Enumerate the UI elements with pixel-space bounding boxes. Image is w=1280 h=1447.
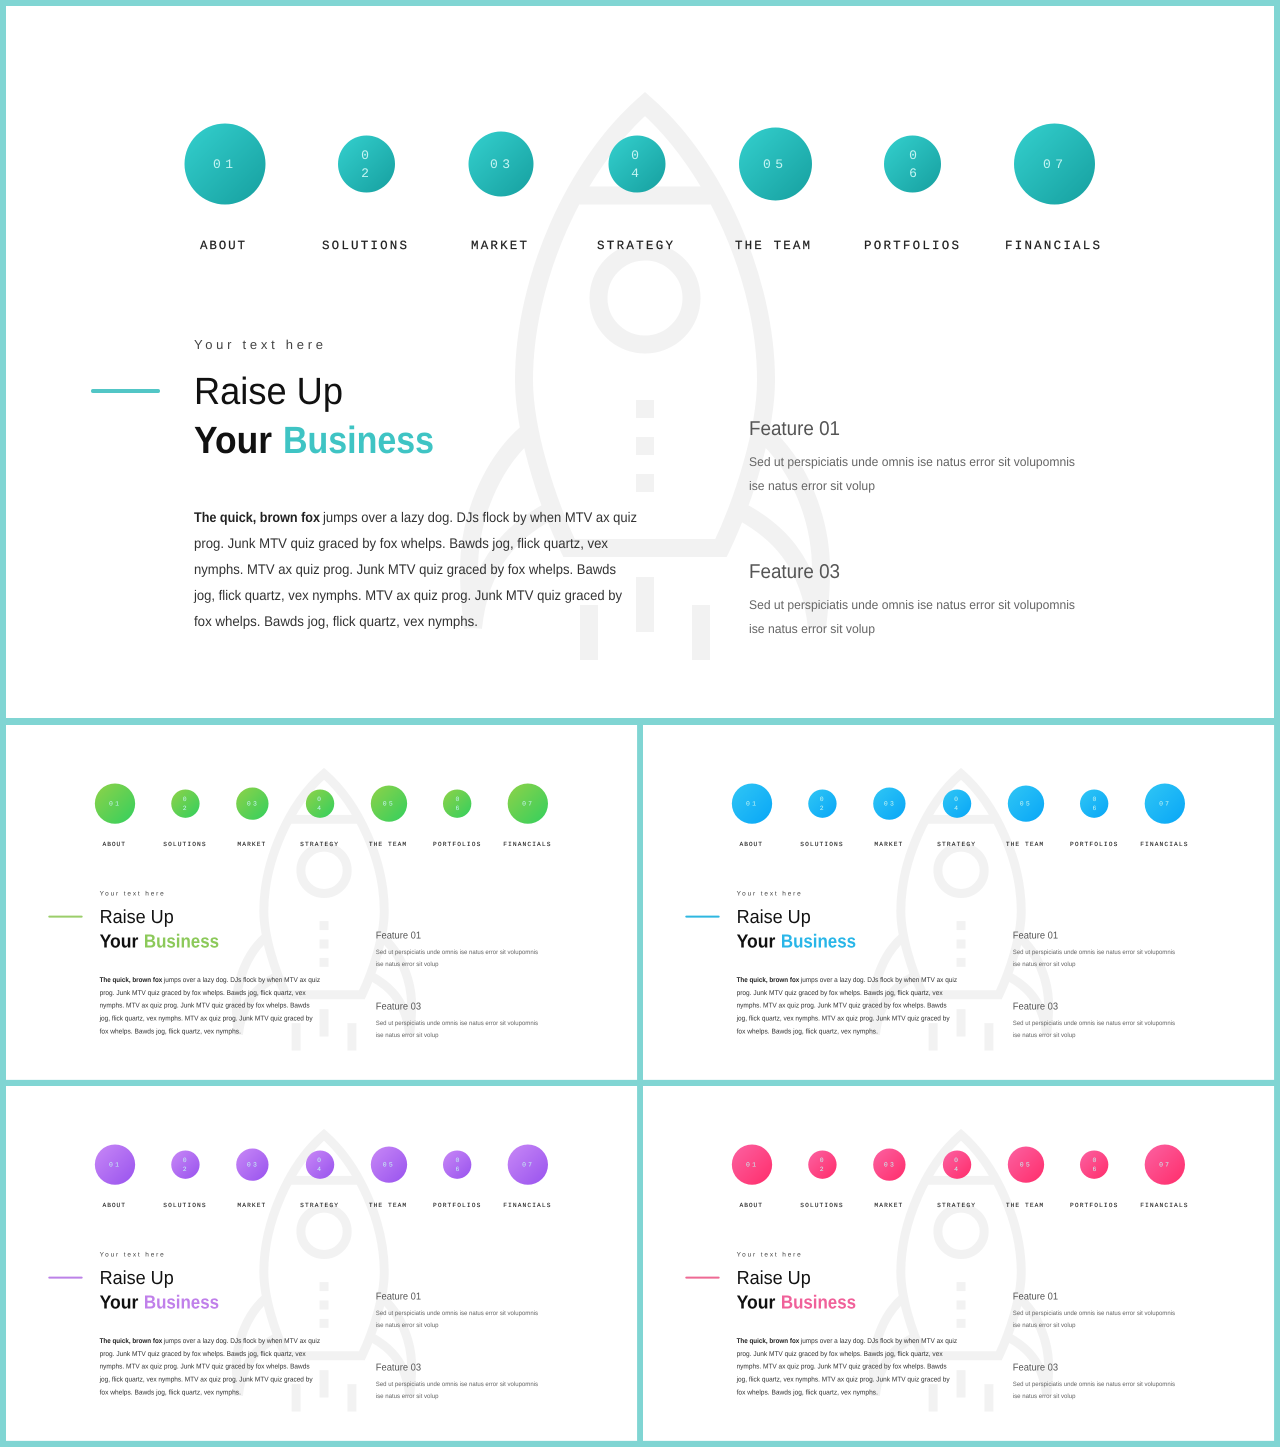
section labels: PORTFOLIOS xyxy=(864,239,959,253)
numbered circles: 07 xyxy=(522,800,532,808)
body text: fox whelps. Bawds jog, flick quartz, vex nymphs. xyxy=(737,1388,878,1396)
numbered circles: 07 xyxy=(522,1161,532,1169)
section labels: MARKET xyxy=(237,841,266,848)
body text: jog, flick quartz, vex nymphs. MTV ax quiz prog. Junk MTV quiz graced by xyxy=(736,1014,950,1022)
numbered circles: 0 xyxy=(455,1157,459,1164)
heading: Your text here xyxy=(100,890,164,897)
numbered circles: 03 xyxy=(247,1161,257,1169)
heading xyxy=(737,1251,856,1313)
numbered circles: 2 xyxy=(361,166,369,181)
body text: jumps over a lazy dog. DJs flock by when MTV ax quiz xyxy=(163,1336,320,1344)
feature 03: ise natus error sit volup xyxy=(1013,1393,1076,1400)
section labels: PORTFOLIOS xyxy=(1070,1202,1117,1209)
heading: Raise Up xyxy=(737,907,811,928)
feature 01: Feature 01 xyxy=(376,930,421,941)
feature 01: Feature 01 xyxy=(1013,930,1058,941)
numbered circles: 2 xyxy=(820,805,824,812)
numbered circles: 01 xyxy=(109,1161,119,1169)
section labels: MARKET xyxy=(874,841,903,848)
numbered circles: 05 xyxy=(763,157,783,172)
numbered circles: 03 xyxy=(884,1161,894,1169)
numbered circles: 4 xyxy=(317,1166,321,1173)
numbered circles: 0 xyxy=(1092,796,1096,803)
numbered circles: 0 xyxy=(183,796,187,803)
heading: Raise Up xyxy=(100,907,174,928)
accent line xyxy=(91,389,160,393)
numbered circles: 6 xyxy=(909,166,917,181)
heading: Business xyxy=(283,420,434,462)
body text: The quick, brown fox xyxy=(737,975,799,983)
section labels xyxy=(200,239,1100,253)
numbered circles: 07 xyxy=(1159,800,1169,808)
section labels: ABOUT xyxy=(740,841,762,848)
numbered circles: 0 xyxy=(183,1157,187,1164)
section labels: SOLUTIONS xyxy=(800,1202,843,1209)
feature 03: ise natus error sit volup xyxy=(376,1393,439,1400)
heading: Raise Up xyxy=(737,1268,811,1289)
body text: nymphs. MTV ax quiz prog. Junk MTV quiz graced by fox whelps. Bawds xyxy=(100,1362,310,1370)
numbered circles: 6 xyxy=(455,1166,459,1173)
numbered circles xyxy=(95,1144,548,1185)
feature 01: ise natus error sit volup xyxy=(376,960,439,967)
heading: Business xyxy=(781,1292,856,1313)
section labels: FINANCIALS xyxy=(1005,239,1100,253)
numbered circles xyxy=(732,783,1185,824)
body text xyxy=(193,509,637,629)
accent line xyxy=(685,1277,720,1279)
numbered circles: 07 xyxy=(1043,157,1063,172)
numbered circles: 4 xyxy=(631,166,639,181)
feature 03: ise natus error sit volup xyxy=(1013,1032,1076,1039)
body text xyxy=(736,1336,957,1396)
feature 03: Sed ut perspiciatis unde omnis ise natus error sit volupomnis xyxy=(1013,1020,1175,1027)
heading xyxy=(737,890,856,952)
numbered circles: 4 xyxy=(317,805,321,812)
panel: pink slide xyxy=(643,1086,1274,1441)
feature 01 xyxy=(376,1291,538,1328)
numbered circles: 2 xyxy=(820,1166,824,1173)
section labels: ABOUT xyxy=(103,1202,125,1209)
section labels: ABOUT xyxy=(103,841,125,848)
section labels: FINANCIALS xyxy=(503,841,550,848)
numbered circles: 03 xyxy=(884,800,894,808)
body text: nymphs. MTV ax quiz prog. Junk MTV quiz graced by fox whelps. Bawds xyxy=(737,1362,947,1370)
heading: Your text here xyxy=(737,1251,801,1258)
body text: The quick, brown fox xyxy=(737,1336,799,1344)
section labels: MARKET xyxy=(471,239,527,253)
body text xyxy=(99,975,320,1035)
feature 03: Sed ut perspiciatis unde omnis ise natus error sit volupomnis xyxy=(376,1381,538,1388)
feature 03: Sed ut perspiciatis unde omnis ise natus error sit volupomnis xyxy=(1013,1381,1175,1388)
feature 01 xyxy=(749,418,1075,493)
numbered circles: 0 xyxy=(909,148,917,163)
heading: Your xyxy=(737,1292,775,1313)
heading: Your text here xyxy=(100,1251,164,1258)
feature 01: ise natus error sit volup xyxy=(749,479,875,493)
section labels: SOLUTIONS xyxy=(322,239,407,253)
section labels: MARKET xyxy=(237,1202,266,1209)
feature 01: ise natus error sit volup xyxy=(376,1321,439,1328)
feature 01 xyxy=(376,930,538,967)
body text: nymphs. MTV ax quiz prog. Junk MTV quiz graced by fox whelps. Bawds xyxy=(100,1001,310,1009)
panel: blue slide xyxy=(643,725,1274,1080)
feature 03: ise natus error sit volup xyxy=(749,622,875,636)
section labels: SOLUTIONS xyxy=(163,841,206,848)
numbered circles xyxy=(184,124,1095,204)
body text: jumps over a lazy dog. DJs flock by when MTV ax quiz xyxy=(800,1336,957,1344)
feature 03 xyxy=(376,1362,538,1400)
numbered circles: 0 xyxy=(954,1157,958,1164)
section labels: ABOUT xyxy=(200,239,245,253)
section labels: PORTFOLIOS xyxy=(433,1202,480,1209)
body text: fox whelps. Bawds jog, flick quartz, vex nymphs. xyxy=(100,1388,241,1396)
feature 03: Feature 03 xyxy=(376,1362,421,1373)
heading: Your xyxy=(100,931,138,952)
feature 03 xyxy=(749,561,1075,636)
numbered circles: 01 xyxy=(746,800,756,808)
numbered circles: 6 xyxy=(455,805,459,812)
section labels xyxy=(103,1202,550,1209)
feature 01 xyxy=(1013,1291,1175,1328)
heading xyxy=(100,1251,219,1313)
heading: Business xyxy=(144,931,219,952)
icon: rocket watermark xyxy=(469,104,821,660)
numbered circles: 0 xyxy=(954,796,958,803)
body text: The quick, brown fox xyxy=(100,1336,162,1344)
numbered circles: 4 xyxy=(954,805,958,812)
body text: nymphs. MTV ax quiz prog. Junk MTV quiz graced by fox whelps. Bawds xyxy=(737,1001,947,1009)
section labels: STRATEGY xyxy=(937,841,975,848)
panel: purple slide xyxy=(6,1086,637,1441)
feature 01: Feature 01 xyxy=(1013,1291,1058,1302)
icon: rocket watermark xyxy=(236,774,412,1050)
feature 01: Feature 01 xyxy=(749,418,840,440)
heading: Raise Up xyxy=(194,371,343,413)
panel: teal slide xyxy=(6,6,1274,718)
icon: rocket watermark xyxy=(873,774,1049,1050)
accent line xyxy=(48,916,83,918)
feature 03: Sed ut perspiciatis unde omnis ise natus error sit volupomnis xyxy=(749,598,1075,612)
heading: Your text here xyxy=(737,890,801,897)
numbered circles: 05 xyxy=(1020,1161,1030,1169)
section labels: MARKET xyxy=(874,1202,903,1209)
section labels: FINANCIALS xyxy=(1140,1202,1187,1209)
heading: Your text here xyxy=(194,337,323,352)
numbered circles: 07 xyxy=(1159,1161,1169,1169)
section labels xyxy=(740,1202,1187,1209)
section labels: STRATEGY xyxy=(300,1202,338,1209)
accent line xyxy=(48,1277,83,1279)
feature 03: Feature 03 xyxy=(376,1001,421,1012)
feature 01: Sed ut perspiciatis unde omnis ise natus error sit volupomnis xyxy=(1013,948,1175,955)
numbered circles: 05 xyxy=(383,1161,393,1169)
numbered circles: 0 xyxy=(820,1157,824,1164)
numbered circles: 05 xyxy=(383,800,393,808)
feature 03: Feature 03 xyxy=(749,561,840,583)
body text: The quick, brown fox xyxy=(194,509,320,525)
feature 01: Sed ut perspiciatis unde omnis ise natus error sit volupomnis xyxy=(376,948,538,955)
body text: jog, flick quartz, vex nymphs. MTV ax quiz prog. Junk MTV quiz graced by xyxy=(99,1014,313,1022)
feature 01: ise natus error sit volup xyxy=(1013,1321,1076,1328)
numbered circles: 0 xyxy=(361,148,369,163)
body text: prog. Junk MTV quiz graced by fox whelps. Bawds jog, flick quartz, vex xyxy=(737,1349,943,1357)
numbered circles: 0 xyxy=(1092,1157,1096,1164)
section labels: STRATEGY xyxy=(597,239,673,253)
body text: jumps over a lazy dog. DJs flock by when MTV ax quiz xyxy=(800,975,957,983)
section labels: FINANCIALS xyxy=(503,1202,550,1209)
section labels: THE TEAM xyxy=(1006,1202,1043,1209)
numbered circles: 4 xyxy=(954,1166,958,1173)
feature 01: ise natus error sit volup xyxy=(1013,960,1076,967)
numbered circles: 05 xyxy=(1020,800,1030,808)
heading xyxy=(194,337,434,462)
numbered circles: 2 xyxy=(183,1166,187,1173)
heading: Your xyxy=(194,420,272,462)
heading: Business xyxy=(144,1292,219,1313)
section labels: THE TEAM xyxy=(369,841,406,848)
body text: jog, flick quartz, vex nymphs. MTV ax quiz prog. Junk MTV quiz graced by xyxy=(193,587,622,603)
section labels: THE TEAM xyxy=(1006,841,1043,848)
feature 03 xyxy=(376,1001,538,1039)
feature 01: Feature 01 xyxy=(376,1291,421,1302)
icon: rocket watermark xyxy=(236,1135,412,1411)
heading: Business xyxy=(781,931,856,952)
body text: jog, flick quartz, vex nymphs. MTV ax quiz prog. Junk MTV quiz graced by xyxy=(99,1375,313,1383)
section labels: THE TEAM xyxy=(369,1202,406,1209)
feature 03: Sed ut perspiciatis unde omnis ise natus error sit volupomnis xyxy=(376,1020,538,1027)
section labels: STRATEGY xyxy=(937,1202,975,1209)
numbered circles: 0 xyxy=(317,796,321,803)
section labels xyxy=(740,841,1187,848)
body text: fox whelps. Bawds jog, flick quartz, vex nymphs. xyxy=(100,1027,241,1035)
numbered circles: 0 xyxy=(455,796,459,803)
numbered circles: 0 xyxy=(820,796,824,803)
body text xyxy=(99,1336,320,1396)
numbered circles: 01 xyxy=(109,800,119,808)
section labels: THE TEAM xyxy=(735,239,810,253)
body text: The quick, brown fox xyxy=(100,975,162,983)
numbered circles: 01 xyxy=(746,1161,756,1169)
feature 03: ise natus error sit volup xyxy=(376,1032,439,1039)
body text: prog. Junk MTV quiz graced by fox whelps. Bawds jog, flick quartz, vex xyxy=(100,1349,306,1357)
body text: prog. Junk MTV quiz graced by fox whelps. Bawds jog, flick quartz, vex xyxy=(194,535,608,551)
body text: fox whelps. Bawds jog, flick quartz, vex nymphs. xyxy=(737,1027,878,1035)
section labels: STRATEGY xyxy=(300,841,338,848)
section labels: SOLUTIONS xyxy=(163,1202,206,1209)
feature 03: Feature 03 xyxy=(1013,1001,1058,1012)
numbered circles: 6 xyxy=(1092,805,1096,812)
numbered circles xyxy=(732,1144,1185,1185)
feature 03 xyxy=(1013,1001,1175,1039)
feature 01: Sed ut perspiciatis unde omnis ise natus error sit volupomnis xyxy=(749,455,1075,469)
feature 01: Sed ut perspiciatis unde omnis ise natus error sit volupomnis xyxy=(1013,1309,1175,1316)
section labels: SOLUTIONS xyxy=(800,841,843,848)
section labels: FINANCIALS xyxy=(1140,841,1187,848)
body text: fox whelps. Bawds jog, flick quartz, vex nymphs. xyxy=(194,613,478,629)
icon: rocket watermark xyxy=(873,1135,1049,1411)
section labels xyxy=(103,841,550,848)
section labels: ABOUT xyxy=(740,1202,762,1209)
body text: nymphs. MTV ax quiz prog. Junk MTV quiz graced by fox whelps. Bawds xyxy=(194,561,616,577)
section labels: PORTFOLIOS xyxy=(433,841,480,848)
numbered circles: 2 xyxy=(183,805,187,812)
numbered circles: 0 xyxy=(317,1157,321,1164)
heading xyxy=(100,890,219,952)
body text xyxy=(736,975,957,1035)
heading: Your xyxy=(737,931,775,952)
panel: green slide xyxy=(6,725,637,1080)
numbered circles: 03 xyxy=(490,157,510,172)
numbered circles: 03 xyxy=(247,800,257,808)
body text: prog. Junk MTV quiz graced by fox whelps. Bawds jog, flick quartz, vex xyxy=(100,988,306,996)
accent line xyxy=(685,916,720,918)
body text: jumps over a lazy dog. DJs flock by when MTV ax quiz xyxy=(322,509,637,525)
body text: prog. Junk MTV quiz graced by fox whelps. Bawds jog, flick quartz, vex xyxy=(737,988,943,996)
section labels: PORTFOLIOS xyxy=(1070,841,1117,848)
body text: jumps over a lazy dog. DJs flock by when MTV ax quiz xyxy=(163,975,320,983)
numbered circles: 01 xyxy=(213,157,233,172)
feature 03 xyxy=(1013,1362,1175,1400)
body text: jog, flick quartz, vex nymphs. MTV ax quiz prog. Junk MTV quiz graced by xyxy=(736,1375,950,1383)
heading: Raise Up xyxy=(100,1268,174,1289)
feature 03: Feature 03 xyxy=(1013,1362,1058,1373)
heading: Your xyxy=(100,1292,138,1313)
feature 01 xyxy=(1013,930,1175,967)
feature 01: Sed ut perspiciatis unde omnis ise natus error sit volupomnis xyxy=(376,1309,538,1316)
numbered circles: 6 xyxy=(1092,1166,1096,1173)
numbered circles xyxy=(95,783,548,824)
numbered circles: 0 xyxy=(631,148,639,163)
